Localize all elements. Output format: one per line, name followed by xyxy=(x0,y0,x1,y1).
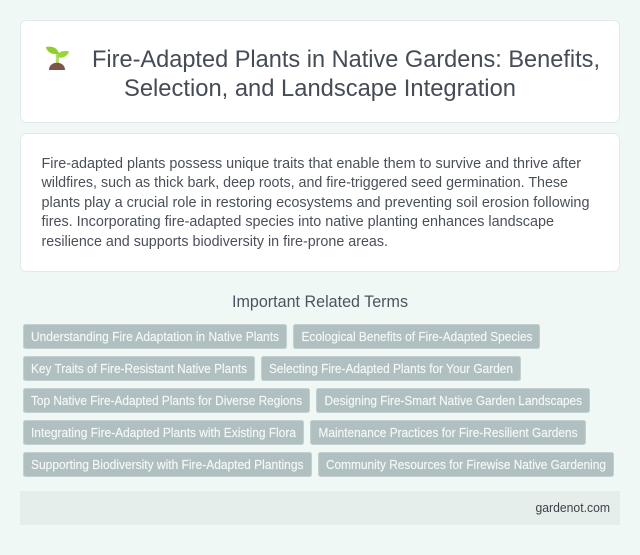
icon: seedling xyxy=(46,47,69,70)
title: Selection, and Landscape Integration xyxy=(124,75,516,102)
tag xyxy=(318,452,614,476)
footer bar xyxy=(20,491,620,525)
heading: related terms: Important Related Terms xyxy=(232,293,408,311)
text block: intro: Fire-adapted plants possess unique traits that enable them to survive and thrive after xyxy=(42,155,581,172)
tag: Understanding Fire Adaptation in Native Plants xyxy=(31,330,279,344)
footer source: gardenot.com xyxy=(536,501,610,515)
tag xyxy=(316,388,590,412)
tag xyxy=(24,420,304,444)
title: Fire-Adapted Plants in Native Gardens: Benefits, xyxy=(92,46,600,73)
tag: Top Native Fire-Adapted Plants for Diverse Regions xyxy=(31,394,302,408)
panel: title card xyxy=(20,20,620,122)
text block: intro: fires. Incorporating fire-adapted species into native planting enhances landscape xyxy=(42,213,554,230)
text block: intro: resilience and supports biodiversity in fire-prone areas. xyxy=(42,233,388,250)
tag xyxy=(24,452,312,476)
panel: intro paragraph xyxy=(20,134,620,272)
tag: Community Resources for Firewise Native Gardening xyxy=(326,458,606,472)
tag xyxy=(262,356,520,380)
tag list xyxy=(24,324,614,476)
tag: Integrating Fire-Adapted Plants with Existing Flora xyxy=(31,426,296,440)
tag: Maintenance Practices for Fire-Resilient Gardens xyxy=(318,426,578,440)
tag xyxy=(24,388,310,412)
text block: intro: wildfires, such as thick bark, deep roots, and fire-triggered seed germination. These xyxy=(41,174,568,191)
tag: Key Traits of Fire-Resistant Native Plants xyxy=(31,362,247,376)
tag: Selecting Fire-Adapted Plants for Your Garden xyxy=(269,362,513,376)
tag xyxy=(310,420,586,444)
tag: Designing Fire-Smart Native Garden Landscapes xyxy=(324,394,582,408)
tag xyxy=(294,324,540,348)
text block: intro: plants play a crucial role in restoring ecosystems and preventing soil erosion following xyxy=(42,194,590,211)
text block: intro xyxy=(41,155,589,250)
title xyxy=(92,46,600,102)
tag xyxy=(24,324,286,348)
tag: Ecological Benefits of Fire-Adapted Species xyxy=(302,330,532,344)
tag xyxy=(24,356,254,380)
tag: Supporting Biodiversity with Fire-Adapted Plantings xyxy=(31,458,304,472)
